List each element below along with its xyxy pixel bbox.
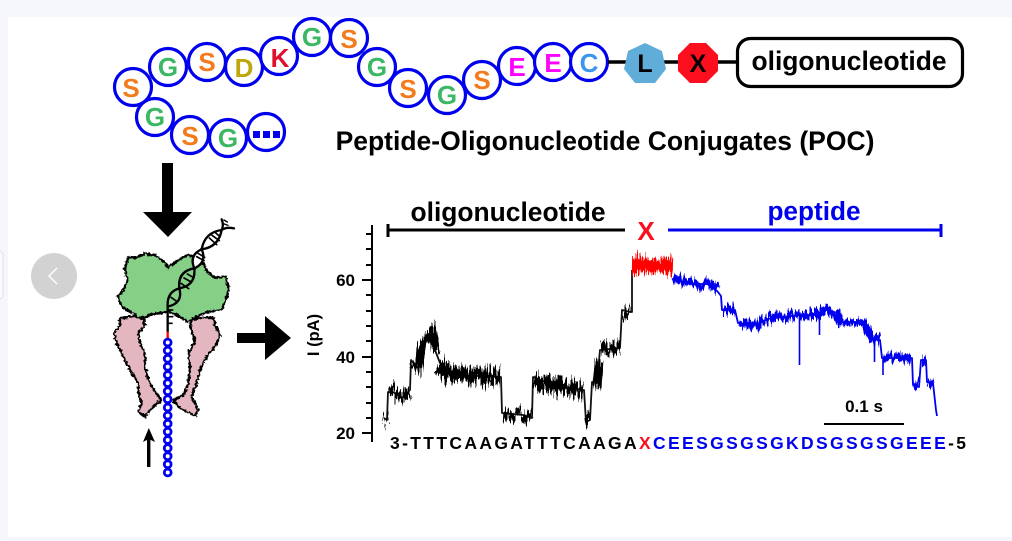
peptide bead chain bbox=[114, 18, 608, 156]
nanopore diagram bbox=[114, 219, 234, 476]
y axis: I (pA) bbox=[305, 314, 323, 356]
trace: X section bbox=[632, 265, 673, 266]
scale bar bbox=[824, 397, 904, 424]
arrow: right to trace bbox=[237, 316, 291, 360]
sequence: 3-TTTCAAGATTTCAAGAXCEESGSGSGKDSGSGSGEEE-5 bbox=[390, 433, 966, 453]
trace: peptide section bbox=[673, 278, 933, 386]
linker chain: L and X residues with oligonucleotide box: oligonucleotide bbox=[752, 46, 946, 76]
protein: green motor bbox=[117, 253, 229, 322]
protein: right pore wall bbox=[173, 317, 220, 416]
region label: peptide: peptide bbox=[767, 196, 861, 226]
carousel previous button bbox=[31, 253, 77, 299]
linker chain: L and X residues with oligonucleotide box: L bbox=[637, 50, 653, 78]
peptide bead chain: S bbox=[473, 65, 491, 95]
arrow: small up arrow bbox=[143, 428, 155, 467]
y axis bbox=[305, 225, 372, 443]
region label: peptide bbox=[668, 196, 941, 237]
peptide bead chain: G bbox=[145, 102, 165, 132]
peptide bead chain: G bbox=[218, 123, 238, 153]
current trace bbox=[384, 265, 937, 422]
trace: peptide steps and spikes bbox=[672, 279, 937, 416]
trace: oligonucleotide medium noise bbox=[385, 310, 630, 421]
peptide bead chain: E bbox=[544, 48, 562, 78]
peptide bead chain: C bbox=[580, 48, 599, 78]
arrow: down into nanopore bbox=[143, 163, 192, 237]
peptide bead chain: G bbox=[367, 52, 387, 82]
linker chain: L and X residues with oligonucleotide box bbox=[608, 38, 962, 86]
peptide bead chain: D bbox=[235, 53, 253, 83]
sidebar tab bbox=[0, 251, 3, 299]
translocating peptide beads bbox=[164, 339, 171, 476]
peptide bead chain: E bbox=[508, 52, 526, 82]
trace: oligonucleotide connecting steps bbox=[384, 270, 632, 422]
icon: DNA helix bbox=[168, 219, 234, 332]
peptide bead chain: S bbox=[122, 73, 140, 103]
y axis: 60 bbox=[336, 271, 355, 290]
peptide bead chain: S bbox=[181, 121, 199, 151]
trace: oligonucleotide heavy noise bbox=[438, 366, 583, 390]
title: Peptide-Oligonucleotide Conjugates (POC) bbox=[336, 126, 874, 156]
region label: oligonucleotide: oligonucleotide bbox=[410, 197, 606, 227]
y axis: 20 bbox=[336, 424, 355, 443]
peptide bead chain: G bbox=[158, 52, 178, 82]
protein: left pore wall bbox=[114, 316, 162, 417]
region label: oligonucleotide bbox=[388, 197, 625, 237]
peptide bead chain: K bbox=[271, 43, 290, 73]
peptide bead chain: S bbox=[340, 24, 358, 54]
region label: X: X bbox=[637, 216, 655, 246]
scale bar: 0.1 s bbox=[845, 397, 883, 416]
y axis: 40 bbox=[336, 348, 355, 367]
linker chain: L and X residues with oligonucleotide box: X bbox=[690, 50, 707, 78]
peptide bead chain: S bbox=[399, 74, 417, 104]
peptide bead chain: G bbox=[437, 80, 457, 110]
peptide bead chain: G bbox=[302, 22, 322, 52]
peptide bead chain: S bbox=[198, 47, 216, 77]
